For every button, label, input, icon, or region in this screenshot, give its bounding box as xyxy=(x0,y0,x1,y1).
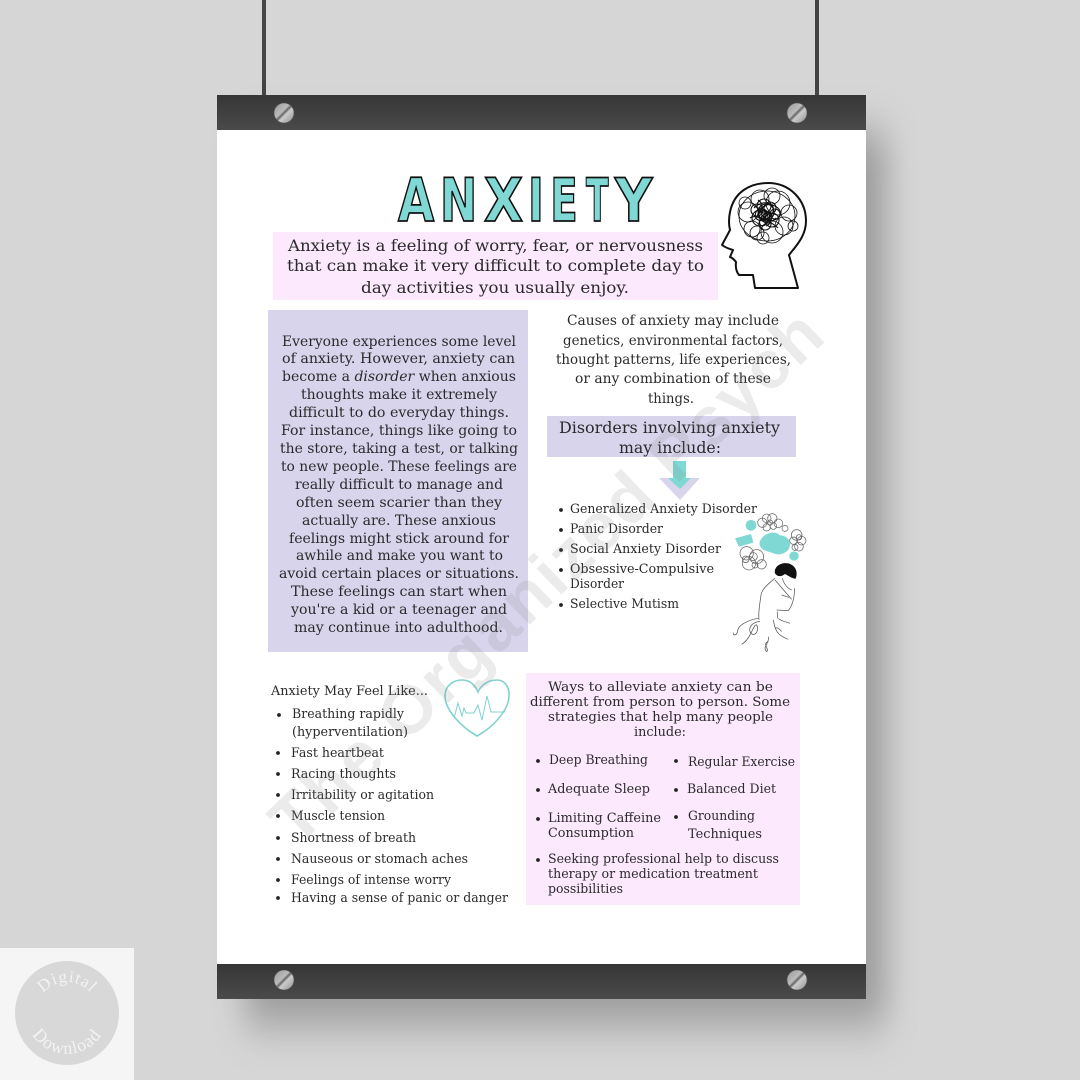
panel: ways to alleviate anxiety: Regular Exercise xyxy=(688,755,795,770)
panel: everyday anxiety explanation: the store, taking a test, or talking xyxy=(280,441,518,457)
panel: everyday anxiety explanation: actually are. These anxious xyxy=(302,513,496,529)
panel: everyday anxiety explanation: you're a kid or a teenager and xyxy=(290,602,507,618)
disorders list: Disorder xyxy=(570,577,625,592)
panel: ways to alleviate anxiety: Adequate Sleep xyxy=(547,782,650,797)
intro panel: that can make it very difficult to complete day to xyxy=(287,256,704,275)
panel: ways to alleviate anxiety: Techniques xyxy=(688,827,762,842)
feelings list: Shortness of breath xyxy=(291,831,417,846)
feelings list: Breathing rapidly xyxy=(292,707,405,722)
panel: everyday anxiety explanation: thoughts make it extremely xyxy=(301,387,497,403)
title xyxy=(398,166,654,236)
panel: everyday anxiety explanation: may continue into adulthood. xyxy=(294,620,503,636)
icon: head with tangled brain xyxy=(722,183,806,288)
poster shadow xyxy=(245,132,886,1025)
badge: digital download xyxy=(0,948,134,1080)
feelings list: Racing thoughts xyxy=(291,767,396,782)
feelings list: Feelings of intense worry xyxy=(291,873,452,888)
causes text block xyxy=(556,313,791,407)
watermark: The Organized Psych xyxy=(255,294,839,859)
icon: worried person with thought clouds xyxy=(733,514,806,652)
badge: digital download: Digital xyxy=(36,971,98,992)
panel: everyday anxiety explanation: Everyone experiences some level xyxy=(282,334,517,350)
title: T xyxy=(586,166,609,236)
disorders list xyxy=(559,502,758,612)
intro panel: Anxiety is a feeling of worry, fear, or nervousness xyxy=(287,236,703,255)
causes text block: Causes of anxiety may include xyxy=(567,313,779,329)
title: N xyxy=(440,166,477,236)
panel: ways to alleviate anxiety: Balanced Diet xyxy=(687,782,777,797)
panel: ways to alleviate anxiety: Seeking professional help to discuss xyxy=(548,852,779,867)
badge: digital download: Download xyxy=(32,1028,102,1054)
panel: ways to alleviate anxiety: Limiting Caffeine xyxy=(548,811,661,826)
feelings list: Irritability or agitation xyxy=(291,788,435,803)
disorders list: Social Anxiety Disorder xyxy=(570,542,722,557)
panel: everyday anxiety explanation: to new people. These feelings are xyxy=(281,459,517,475)
causes text block: or any combination of these xyxy=(575,371,771,387)
panel: ways to alleviate anxiety: different from person to person. Some xyxy=(530,695,790,710)
feelings list: Fast heartbeat xyxy=(291,746,385,761)
panel: ways to alleviate anxiety: possibilities xyxy=(548,882,623,897)
disorders list: Selective Mutism xyxy=(570,597,679,612)
heading: anxiety may feel like: Anxiety May Feel Like... xyxy=(270,684,428,699)
feelings list: Muscle tension xyxy=(291,809,386,824)
causes text block: things. xyxy=(648,391,694,407)
top bar with screws xyxy=(217,95,866,130)
panel: everyday anxiety explanation: often seem scarier than they xyxy=(296,495,502,511)
disorders list: Panic Disorder xyxy=(570,522,664,537)
panel: ways to alleviate anxiety: strategies that help many people xyxy=(548,710,773,725)
poster sheet xyxy=(217,125,866,970)
icon: heart with heartbeat xyxy=(445,680,509,736)
title: E xyxy=(550,166,578,236)
heading: disorders xyxy=(547,416,796,457)
heading: disorders: may include: xyxy=(619,438,721,457)
intro panel xyxy=(273,232,718,300)
feelings list: Nauseous or stomach aches xyxy=(291,852,468,867)
panel: ways to alleviate anxiety: Consumption xyxy=(548,826,635,841)
hanging rods xyxy=(262,0,819,96)
title: X xyxy=(484,166,523,236)
panel: everyday anxiety explanation: avoid certain places or situations. xyxy=(279,566,519,582)
feelings list xyxy=(276,707,509,906)
panel: ways to alleviate anxiety: Grounding xyxy=(688,809,755,824)
panel: everyday anxiety explanation: awhile and make you want to xyxy=(296,548,503,564)
panel: ways to alleviate anxiety: Deep Breathing xyxy=(549,753,648,768)
disorders list: Generalized Anxiety Disorder xyxy=(570,502,758,517)
disorders list: Obsessive-Compulsive xyxy=(570,562,714,577)
intro panel: day activities you usually enjoy. xyxy=(361,278,629,297)
panel: everyday anxiety explanation: really difficult to manage and xyxy=(295,477,503,493)
panel: everyday anxiety explanation: of anxiety. However, anxiety can xyxy=(282,351,515,367)
panel: everyday anxiety explanation xyxy=(268,310,528,652)
title: Y xyxy=(614,166,654,236)
feelings list: (hyperventilation) xyxy=(292,725,408,740)
heading: disorders: Disorders involving anxiety xyxy=(559,418,780,437)
panel: ways to alleviate anxiety: include: xyxy=(634,725,686,740)
panel: everyday anxiety explanation: become a disorder when anxious xyxy=(282,369,516,385)
title: I xyxy=(528,166,544,236)
title: A xyxy=(398,166,435,236)
panel: everyday anxiety explanation: feelings might stick around for xyxy=(289,531,509,547)
panel: ways to alleviate anxiety: therapy or medication treatment xyxy=(548,867,759,882)
feelings list: Having a sense of panic or danger xyxy=(291,891,509,906)
causes text block: thought patterns, life experiences, xyxy=(556,352,791,368)
causes text block: genetics, environmental factors, xyxy=(563,333,783,349)
bottom bar with screws xyxy=(217,964,866,999)
panel: ways to alleviate anxiety: Ways to alleviate anxiety can be xyxy=(548,680,773,695)
arrow: down xyxy=(659,461,700,500)
panel: everyday anxiety explanation: These feelings can start when xyxy=(291,584,507,600)
panel: everyday anxiety explanation: difficult to do everyday things. xyxy=(289,405,509,421)
panel: ways to alleviate anxiety xyxy=(526,673,800,905)
panel: everyday anxiety explanation: For instance, things like going to xyxy=(281,423,517,439)
